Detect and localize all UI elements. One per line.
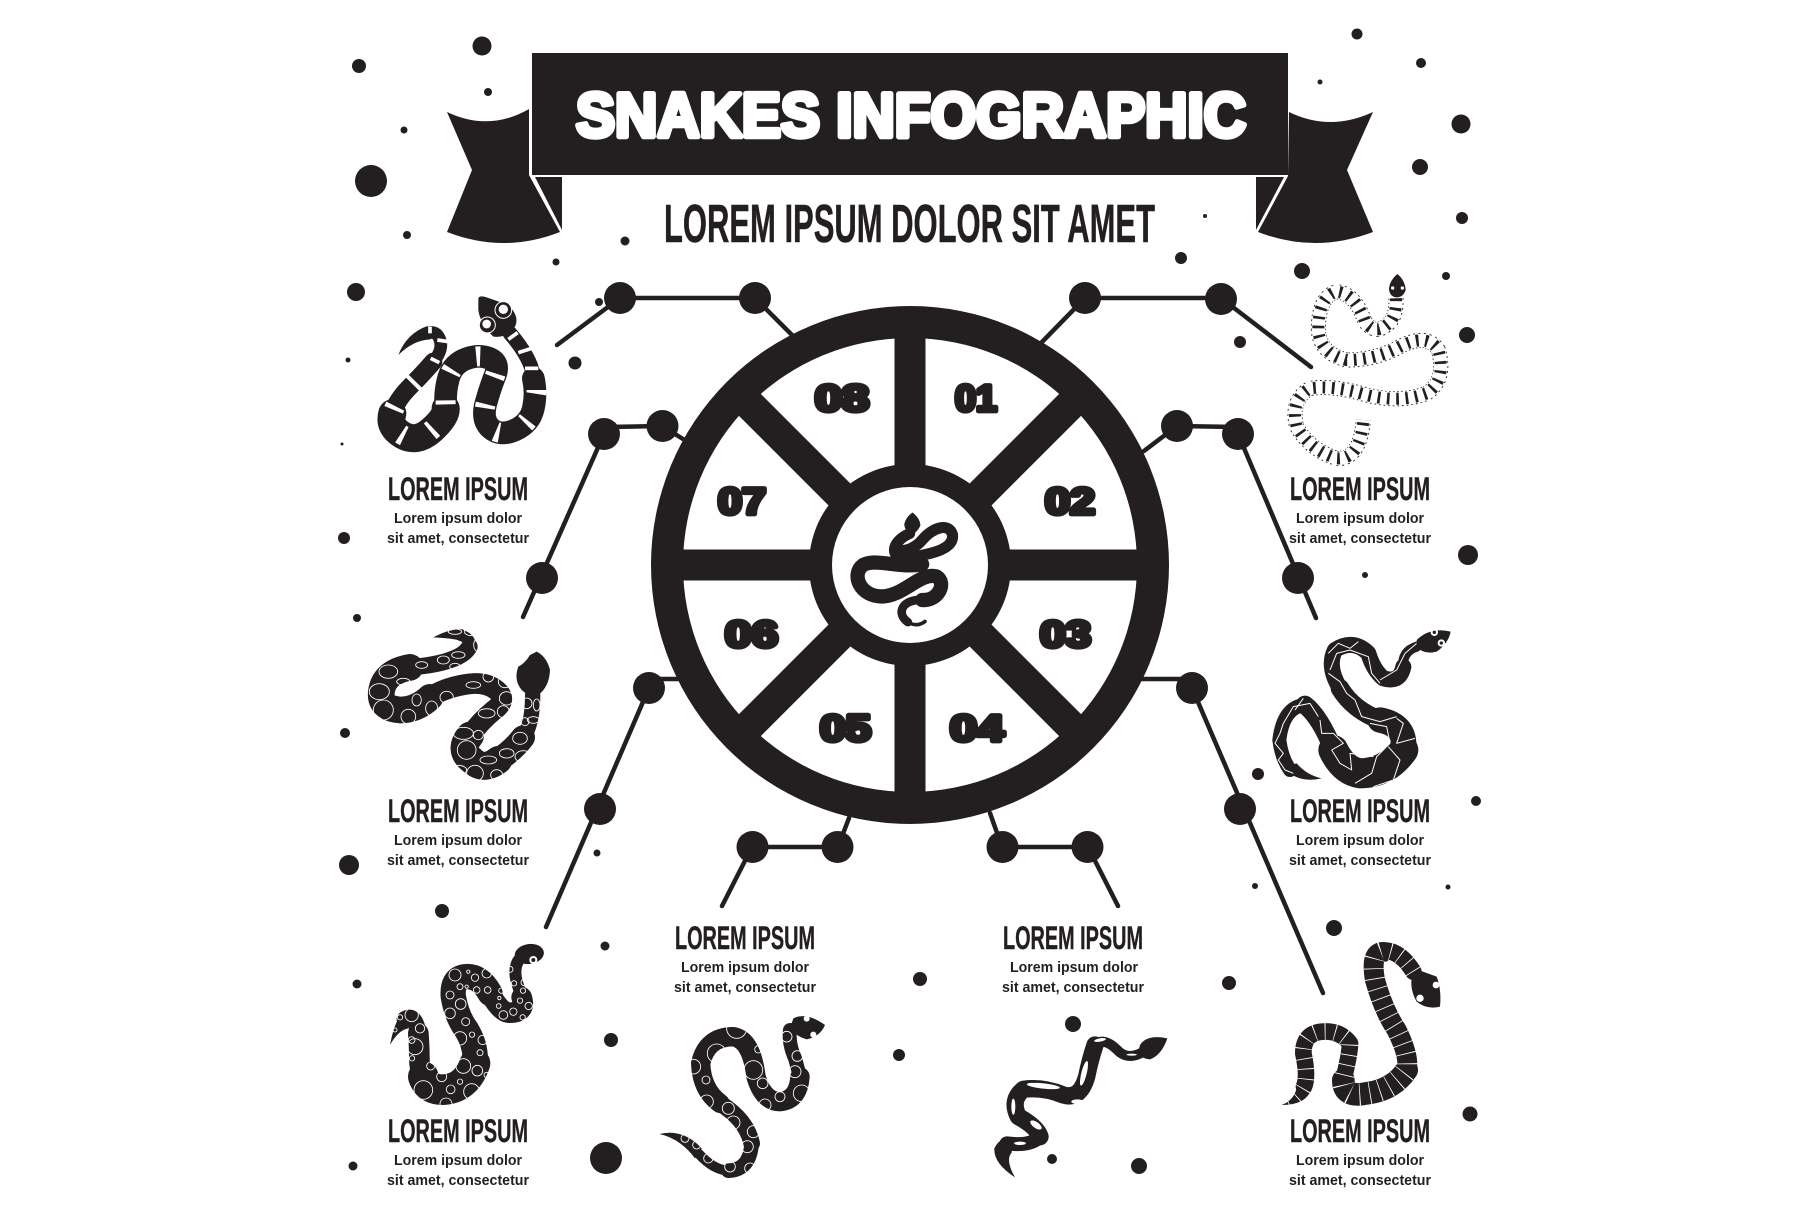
label: bottom centre left: [674, 920, 816, 996]
head: [516, 652, 550, 695]
connector: 05 bottom: [722, 818, 854, 906]
head: [790, 1016, 825, 1039]
label: bottom left: Lorem ipsum dolor: [394, 1152, 522, 1169]
label: middle left: [387, 793, 529, 869]
snake 2: scaled snake middle left: [369, 628, 550, 781]
banner rectangle: [532, 53, 1288, 175]
label: middle left: sit amet, consectetur: [387, 852, 529, 869]
label: top left: Lorem ipsum dolor: [394, 510, 522, 527]
label: bottom centre right: Lorem ipsum dolor: [1010, 959, 1138, 976]
connector: 08 top left: [557, 282, 792, 345]
right ribbon tail: [1258, 112, 1373, 243]
label: bottom right: [1289, 1113, 1431, 1189]
head: [1138, 1037, 1167, 1059]
scattered background dots: [338, 28, 1481, 1174]
connector: 01 top right: [1042, 282, 1311, 367]
snake 1: banded snake top left: [391, 296, 538, 438]
label: bottom centre right: LOREM IPSUM: [1003, 920, 1143, 956]
wheel numbers: 02: [1045, 481, 1095, 522]
label: middle right: [1289, 793, 1431, 869]
wheel numbers: 08: [815, 378, 869, 419]
wheel numbers: [718, 378, 1095, 749]
snake 7: dashed striped snake top right: [1295, 274, 1441, 458]
connector: 04 bottom: [986, 813, 1118, 906]
snake 6: ribbed snake bottom right: [1282, 951, 1440, 1105]
connector: 07 left: [523, 410, 683, 617]
label: bottom centre left: sit amet, consectetur: [674, 979, 816, 996]
label: bottom left: sit amet, consectetur: [387, 1172, 529, 1189]
label: middle right: sit amet, consectetur: [1289, 852, 1431, 869]
label: top right: [1289, 471, 1431, 547]
label: top right: LOREM IPSUM: [1290, 471, 1430, 507]
right ribbon fold: [1256, 177, 1284, 230]
subtitle: LOREM IPSUM DOLOR SIT AMET: [664, 195, 1155, 254]
wheel numbers: 06: [725, 614, 778, 655]
label: top right: Lorem ipsum dolor: [1296, 510, 1424, 527]
label: bottom centre right: [1002, 920, 1144, 996]
label: top left: LOREM IPSUM: [388, 471, 528, 507]
label: middle left: LOREM IPSUM: [388, 793, 528, 829]
title: SNAKES INFOGRAPHIC: [576, 82, 1246, 150]
label: top left: sit amet, consectetur: [387, 530, 529, 547]
label: bottom left: LOREM IPSUM: [388, 1113, 528, 1149]
head: [478, 296, 516, 337]
connector: 06 lower left: [546, 672, 678, 927]
head: [1411, 970, 1440, 1008]
icon: central snake: [858, 512, 953, 625]
wheel numbers: 04: [950, 708, 1005, 749]
label: bottom right: sit amet, consectetur: [1289, 1172, 1431, 1189]
label: bottom left: [387, 1113, 529, 1189]
ring pattern: [393, 966, 532, 1110]
head: [1389, 274, 1406, 297]
label: bottom centre right: sit amet, consectetur: [1002, 979, 1144, 996]
label: bottom centre left: LOREM IPSUM: [675, 920, 815, 956]
snake 4: spotted snake bottom centre left: [659, 1016, 825, 1174]
wheel numbers: 03: [1040, 614, 1091, 655]
label: bottom right: Lorem ipsum dolor: [1296, 1152, 1424, 1169]
left ribbon fold: [535, 177, 562, 230]
label: bottom right: LOREM IPSUM: [1290, 1113, 1430, 1149]
stripes: [391, 356, 537, 438]
left ribbon tail: [447, 109, 560, 243]
pattern lines: [1275, 642, 1417, 787]
snake 3: ringed snake bottom left: [390, 942, 545, 1110]
central wheel: [651, 306, 1169, 824]
label: middle left: Lorem ipsum dolor: [394, 832, 522, 849]
snake 5: blotched snake bottom centre right: [994, 1037, 1167, 1177]
connector: 03 lower right: [1142, 672, 1323, 993]
blotches: [1011, 1037, 1137, 1145]
label: middle right: LOREM IPSUM: [1290, 793, 1430, 829]
wheel numbers: 07: [718, 481, 766, 522]
wheel numbers: 01: [955, 378, 997, 419]
spot pattern: [681, 1018, 810, 1174]
wheel numbers: 05: [820, 708, 871, 749]
label: middle right: Lorem ipsum dolor: [1296, 832, 1424, 849]
scale pattern: [369, 628, 540, 781]
connector lines and nodes: [523, 282, 1323, 993]
head: [513, 942, 545, 966]
ribs: [1282, 951, 1413, 1105]
label: top right: sit amet, consectetur: [1289, 530, 1431, 547]
label: top left: [387, 471, 529, 547]
connector: 02 right: [1144, 410, 1316, 618]
label: bottom centre left: Lorem ipsum dolor: [681, 959, 809, 976]
snake 8: patterned snake middle right: [1275, 629, 1451, 787]
head: [1417, 630, 1451, 653]
title banner ribbon: [447, 53, 1373, 243]
